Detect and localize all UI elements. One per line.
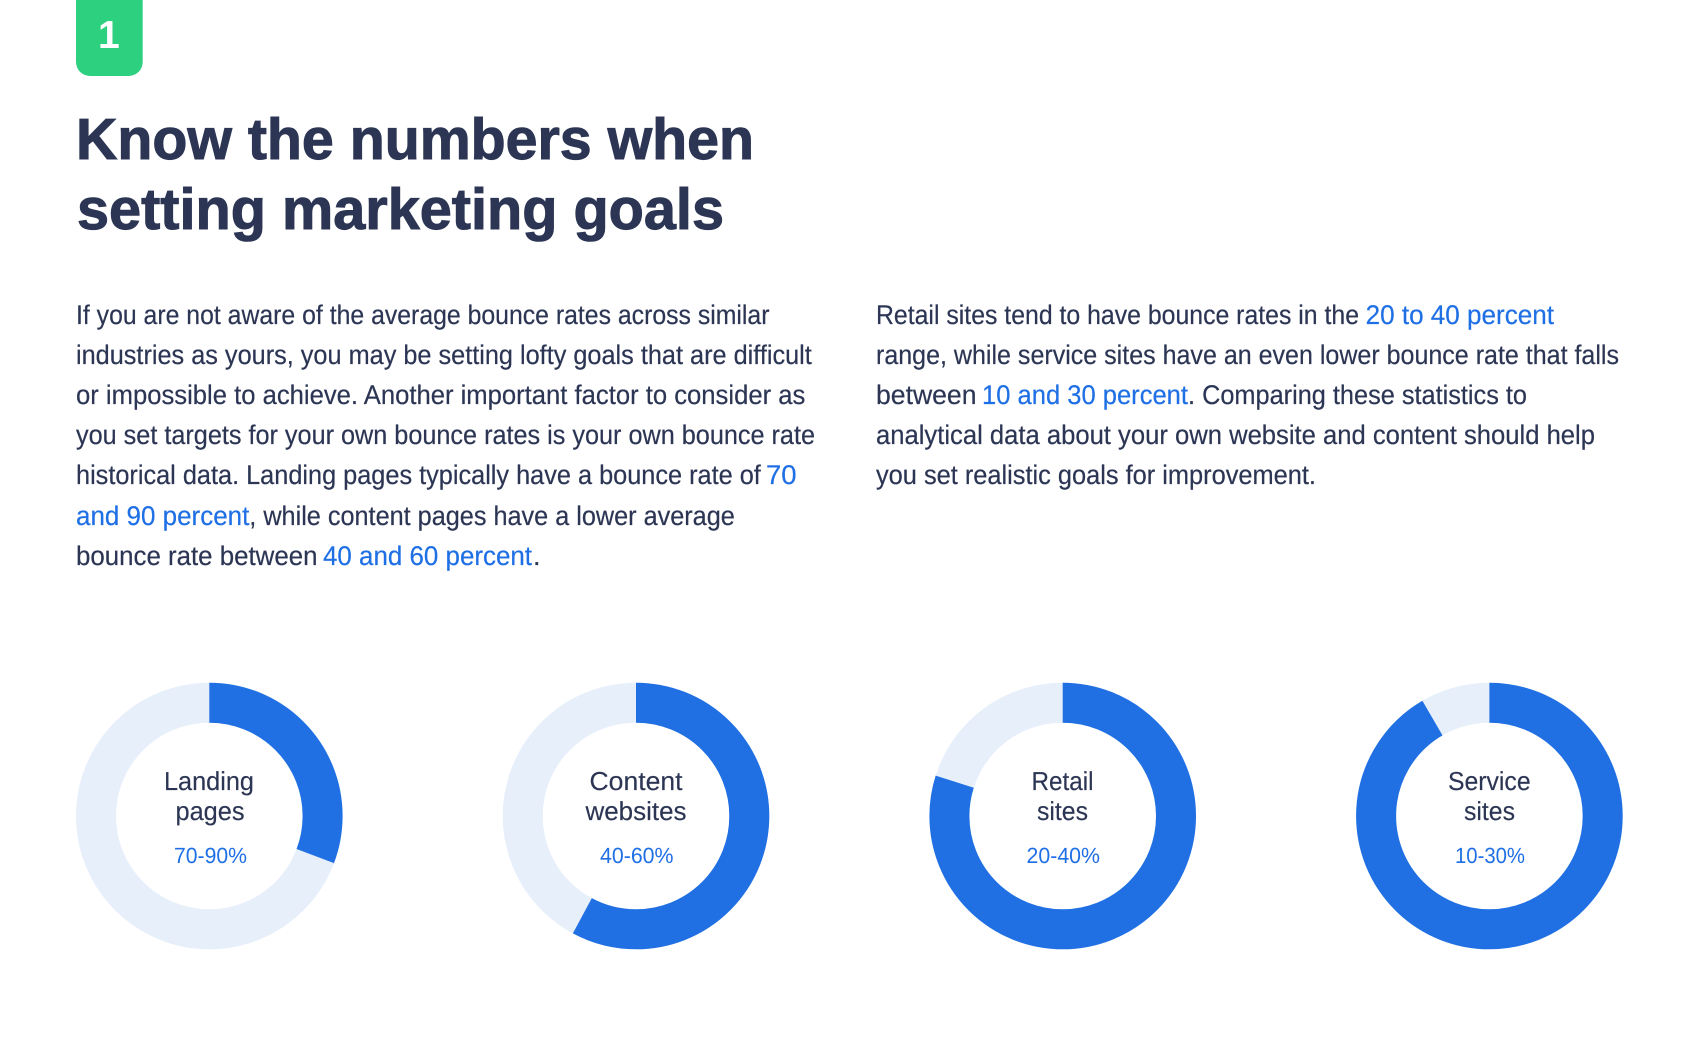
title <box>76 107 754 242</box>
text block: left column: If you are not aware of the average bounce rates across similar <box>76 300 770 330</box>
badge: step number 1: 1 <box>98 14 120 57</box>
text block: right column: you set realistic goals for improvement. <box>876 460 1316 490</box>
donut chart: service sites 10-30%: 10-30% <box>1455 843 1525 868</box>
text block: right column: between <box>876 380 976 410</box>
text block: right column <box>876 300 1619 490</box>
text block: left column: you set targets for your own bounce rates is your own bounce rate <box>76 420 815 450</box>
donut chart: retail sites 20-40%: sites <box>1037 796 1088 826</box>
donut chart: content websites 40-60%: 40-60% <box>600 843 674 868</box>
text block: left column <box>76 300 815 571</box>
text block: left column: 70 <box>766 460 797 490</box>
text block: left column: or impossible to achieve. Another important factor to consider as <box>76 380 805 410</box>
title: Know the numbers when <box>76 107 754 172</box>
text block: left column: bounce rate between <box>76 541 318 571</box>
text block: left column: historical data. Landing pages typically have a bounce rate of <box>76 460 761 490</box>
text block: right column: range, while service sites have an even lower bounce rate that falls <box>876 340 1619 370</box>
donut chart: content websites 40-60%: Content <box>590 766 683 796</box>
text block: right column: 20 to 40 percent <box>1366 300 1554 330</box>
donut chart: landing pages 70-90% <box>96 703 323 929</box>
text block: right column: Retail sites tend to have bounce rates in the <box>876 300 1359 330</box>
text block: right column: . Comparing these statistics to <box>1188 380 1527 410</box>
text block: right column: analytical data about your own website and content should help <box>876 420 1595 450</box>
text block: right column: 10 and 30 percent <box>982 380 1188 410</box>
donut chart: retail sites 20-40% <box>949 703 1176 929</box>
donut chart: content websites 40-60%: websites <box>585 796 686 826</box>
donut chart: landing pages 70-90%: 70-90% <box>174 843 247 868</box>
donut chart: retail sites 20-40%: 20-40% <box>1026 843 1100 868</box>
donut chart: content websites 40-60% <box>523 703 749 929</box>
text block: left column: . <box>533 541 541 571</box>
donut chart: landing pages 70-90%: pages <box>176 796 244 826</box>
donut chart: retail sites 20-40%: Retail <box>1032 766 1094 796</box>
donut chart: landing pages 70-90%: Landing <box>164 766 254 796</box>
donut chart: service sites 10-30%: Service <box>1448 766 1531 796</box>
text block: left column: 40 and 60 percent <box>323 541 532 571</box>
badge: step number 1 <box>76 0 143 76</box>
text block: left column: industries as yours, you may be setting lofty goals that are difficult <box>76 340 812 370</box>
donut chart: service sites 10-30% <box>1376 703 1603 929</box>
text block: left column: , while content pages have a lower average <box>249 501 735 531</box>
donut chart: service sites 10-30%: sites <box>1464 796 1515 826</box>
title: setting marketing goals <box>77 177 724 242</box>
text block: left column: and 90 percent <box>76 501 250 531</box>
